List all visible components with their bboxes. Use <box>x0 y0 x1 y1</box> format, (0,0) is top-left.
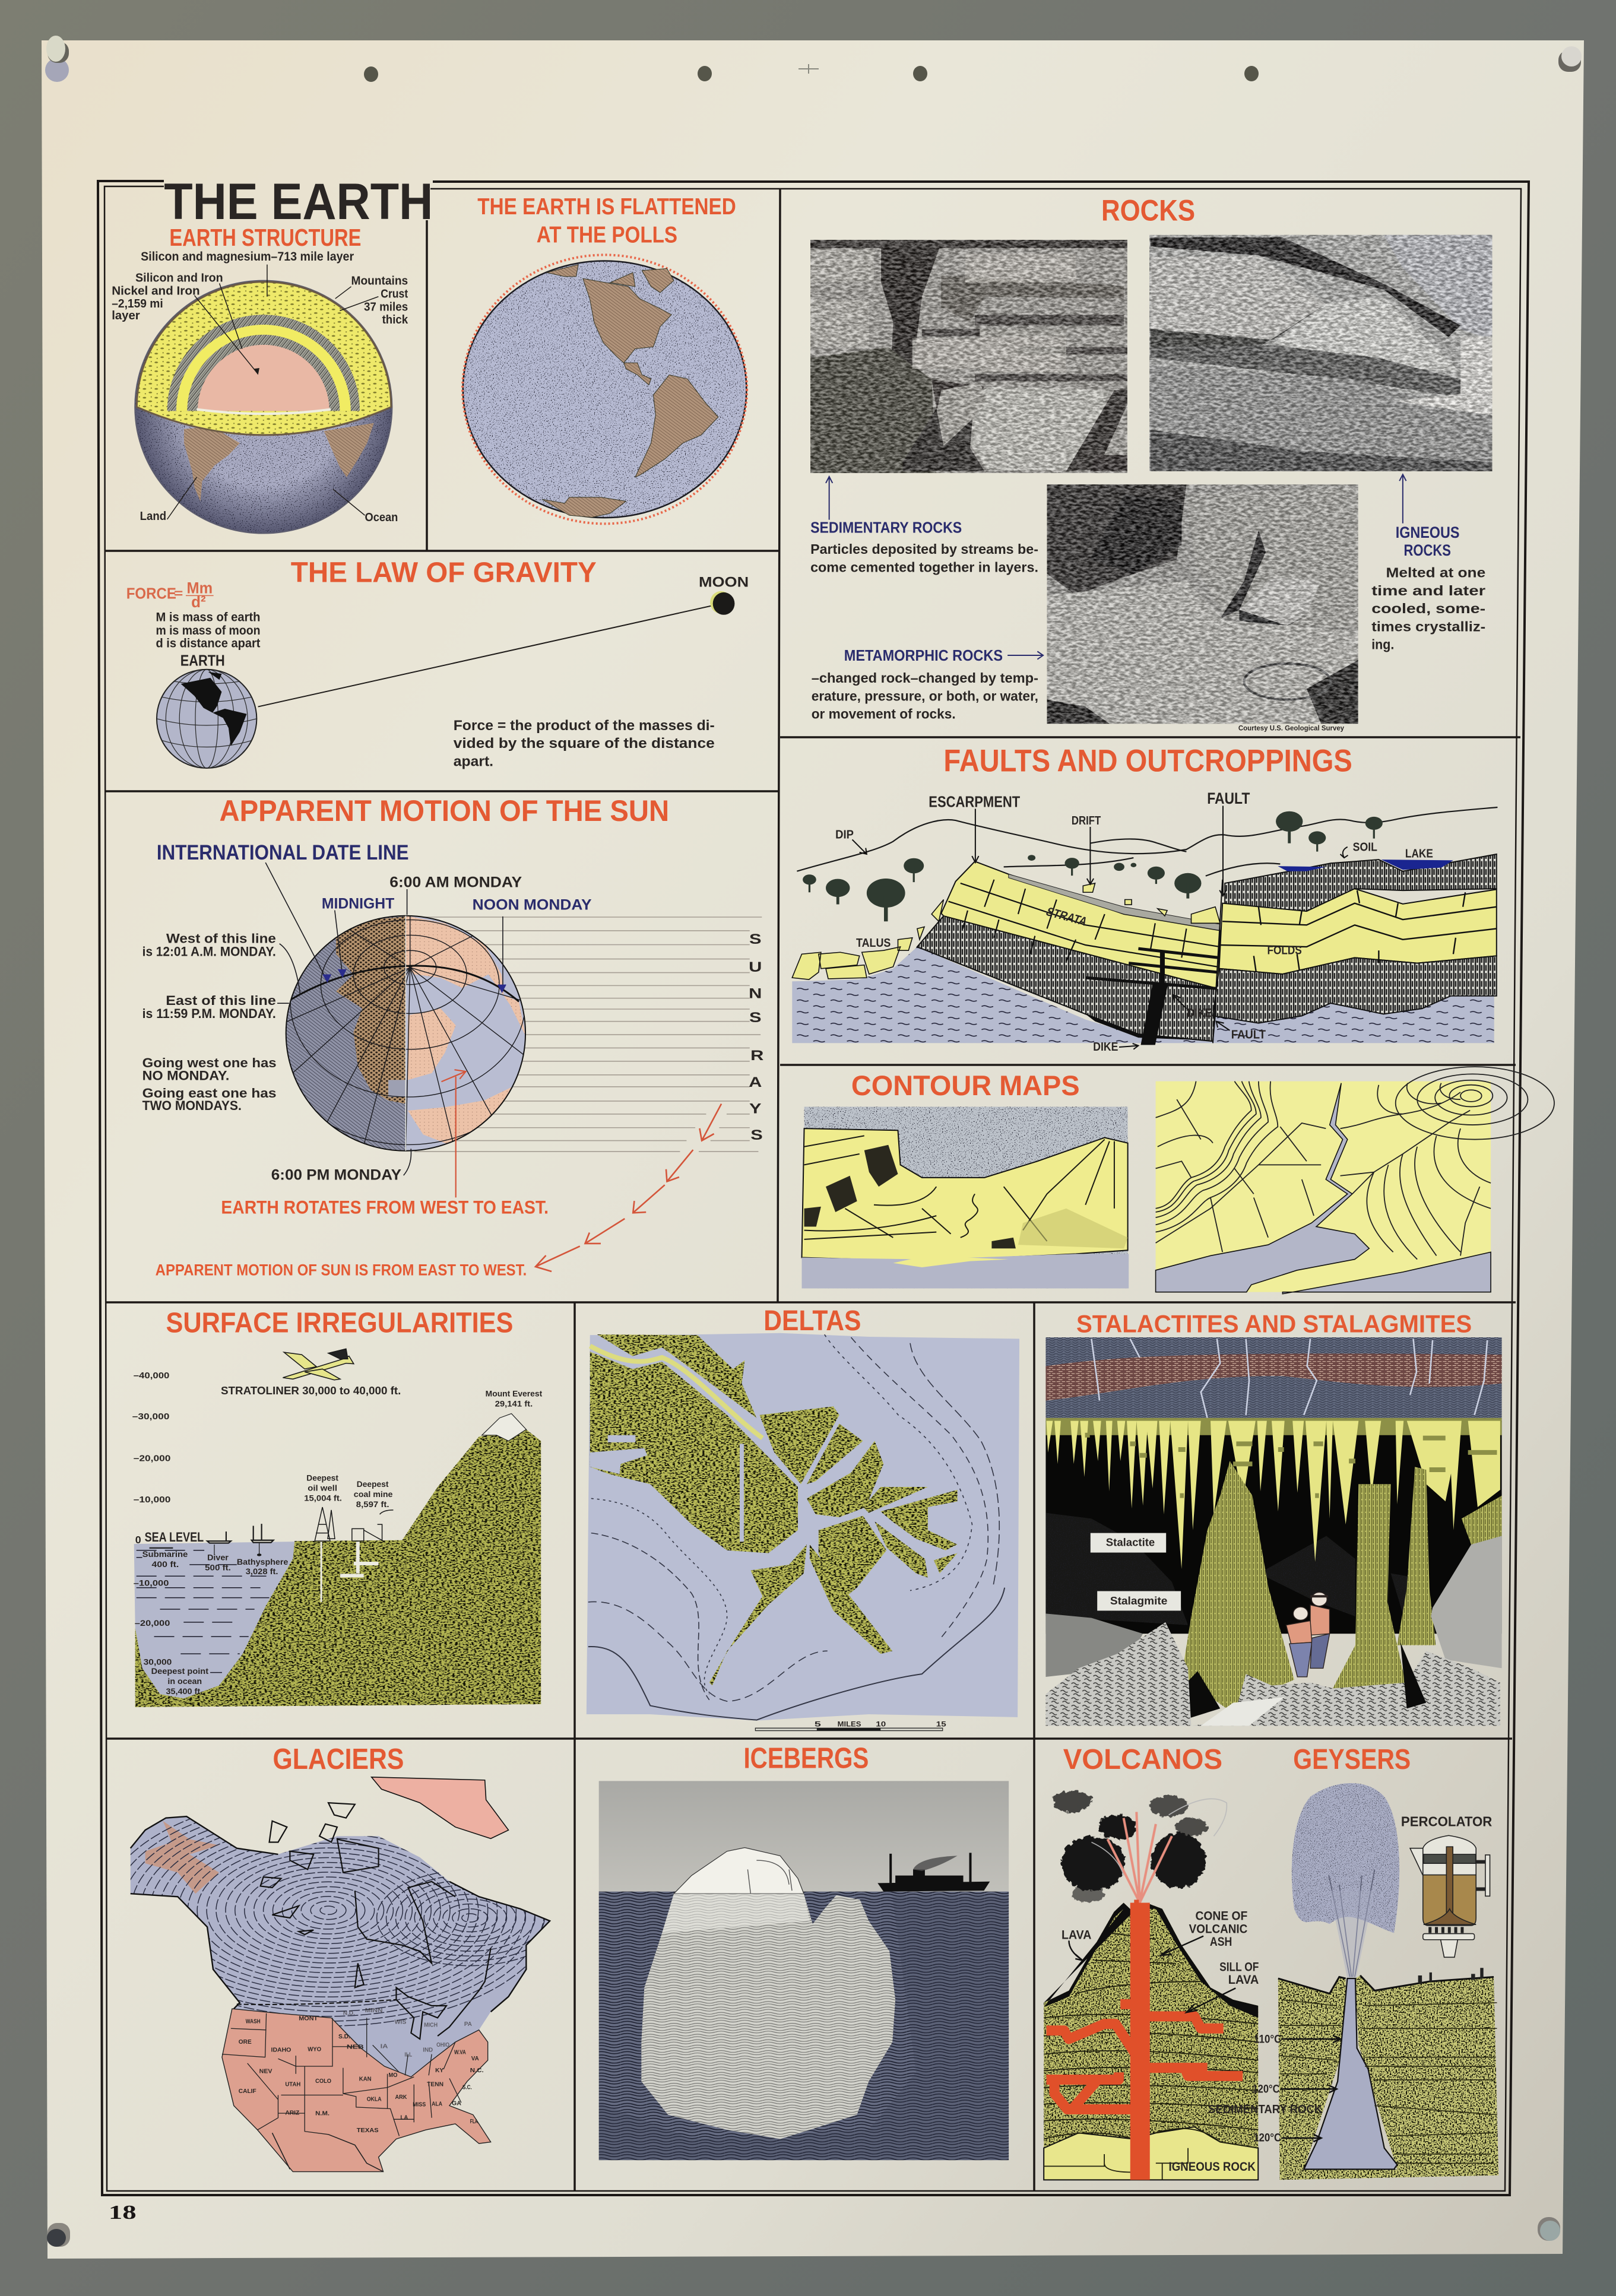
labels: temperatures and sedimentary rock: SEDIMENTARY ROCK <box>1208 2103 1322 2116</box>
labels: rock types: SEDIMENTARY ROCKS <box>810 519 962 536</box>
arrows: geyser temperatures <box>1281 2035 1341 2142</box>
frame and panel rules <box>98 181 1529 2195</box>
map: state labels: IDAHO <box>271 2047 291 2053</box>
diagram: ships, wells and mine <box>150 1507 393 1602</box>
map: state labels: N.D. <box>343 2010 355 2016</box>
map: state labels: WIS <box>394 2019 406 2025</box>
sun rays letters: A <box>749 1074 762 1090</box>
labels: time around the globe: TWO MONDAYS. <box>142 1099 242 1113</box>
labels: temperatures and sedimentary rock: PERCOLATOR <box>1401 1814 1492 1829</box>
sun rays <box>414 917 762 1152</box>
labels: earth layers <box>112 249 408 524</box>
labels: faults diagram: DRIFT <box>1072 814 1101 827</box>
labels: rock types <box>810 519 1459 664</box>
labels: earth layers: Silicon and magnesium–713 mile layer <box>141 249 354 264</box>
photo: sedimentary <box>810 240 1127 473</box>
diagram: ocean <box>134 1542 294 1698</box>
labels: midnight and noon: MIDNIGHT <box>322 896 395 912</box>
photo: igneous <box>1149 235 1493 471</box>
heading: geysers: GEYSERS <box>1293 1743 1411 1775</box>
arrows: volcano <box>1069 1936 1235 2012</box>
map: state labels: ALA <box>432 2101 442 2107</box>
map: state labels: MO <box>389 2072 398 2078</box>
labels: altitude scale <box>132 1371 542 1546</box>
labels: rock types: ROCKS <box>1403 541 1451 559</box>
panel: apparent motion of the sun <box>142 795 763 1279</box>
map: state labels: VA <box>471 2055 479 2062</box>
labels: ocean depths: Diver <box>207 1553 229 1562</box>
map: state labels: MONT <box>299 2015 318 2022</box>
labels: altitude scale: –30,000 <box>132 1412 169 1421</box>
labels: faults diagram <box>835 789 1433 1054</box>
panel: earth structure, flattened earth and gravity <box>112 173 749 769</box>
heading: APPARENT MOTION OF THE SUN <box>219 795 669 827</box>
label: date line: INTERNATIONAL DATE LINE <box>157 841 409 864</box>
labels: ocean depths: Bathysphere <box>237 1558 288 1566</box>
text: rock descriptions: Particles deposited by streams be- <box>810 541 1038 557</box>
map: scale bar <box>755 1720 946 1731</box>
labels: time around the globe: West of this line <box>166 931 276 946</box>
sun rays letters <box>749 931 763 1143</box>
diagram: mount everest snowcap <box>482 1413 526 1441</box>
labels: earth layers: Crust <box>381 287 408 300</box>
labels: rock types: METAMORPHIC ROCKS <box>844 646 1003 664</box>
photo: metamorphic <box>1047 484 1358 724</box>
heading: flattened earth: THE EARTH IS FLATTENED <box>477 194 736 220</box>
labels: altitude scale: 15,004 ft. <box>304 1493 342 1502</box>
panel: glaciers and icebergs <box>103 1742 1009 2224</box>
heading: contour maps: CONTOUR MAPS <box>851 1069 1080 1101</box>
illustration: ash cloud <box>1053 1791 1227 1903</box>
labels: ocean depths: 35,400 ft. <box>166 1687 202 1696</box>
map: contour map <box>1156 1067 1554 1294</box>
illustration: cave visitors <box>1286 1592 1330 1677</box>
labels: temperatures and sedimentary rock: 110°C <box>1254 2033 1281 2046</box>
labels: altitude scale: STRATOLINER 30,000 to 40,000 ft. <box>221 1384 401 1397</box>
text: rock descriptions: times crystalliz- <box>1371 619 1485 635</box>
illustration: landscape <box>801 1106 1129 1289</box>
panel: stalactites and stalagmites <box>1045 1311 1502 1726</box>
labels: earth layers: 37 miles <box>364 300 408 313</box>
labels: volcano: LAVA <box>1228 1972 1259 1987</box>
formula: force: Mm <box>186 579 213 597</box>
leader arrows <box>265 862 506 1175</box>
caption: apparent motion: APPARENT MOTION OF SUN IS FROM EAST TO WEST. <box>156 1262 527 1279</box>
diagram: flattened globe <box>462 255 747 524</box>
illustration: cave wall speckle <box>1045 1513 1430 1625</box>
map: state labels: GA <box>452 2100 461 2107</box>
sun rays letters: N <box>749 985 762 1001</box>
labels: altitude scale: –40,000 <box>134 1371 169 1380</box>
labels: volcano <box>1062 1908 1259 2174</box>
formula: force: = <box>174 586 183 600</box>
illustration: cave floor rocks <box>1045 1536 1502 1726</box>
heading: earth structure: EARTH STRUCTURE <box>169 224 361 251</box>
diagram: land profile <box>135 1429 541 1707</box>
map: state labels: OKLA <box>367 2096 382 2102</box>
map: greenland <box>372 1777 508 1838</box>
labels: earth layers: layer <box>112 309 140 322</box>
map: state labels: IA <box>381 2043 388 2050</box>
illustration: iceberg <box>641 1848 895 2139</box>
map: state labels: S.D. <box>338 2034 350 2040</box>
panel: faults, outcroppings and contour maps <box>792 743 1554 1294</box>
labels: time around the globe: is 11:59 P.M. MONDAY. <box>142 1007 276 1021</box>
map: state labels: W.VA <box>454 2049 466 2056</box>
map: state labels: ARK <box>395 2094 407 2101</box>
map: state labels: LA <box>400 2114 408 2121</box>
labels: altitude scale: 29,141 ft. <box>495 1398 533 1408</box>
illustration: volcano cone and strata <box>1044 1903 1258 2180</box>
map: delta details <box>588 1334 1005 1720</box>
formula key: EARTH <box>180 652 225 669</box>
map: state labels: PA <box>464 2021 472 2028</box>
labels: earth layers: Ocean <box>365 510 398 524</box>
formula: force <box>126 579 214 611</box>
diagram: left fault block <box>917 861 1220 1045</box>
labels: time around the globe: is 12:01 A.M. MONDAY. <box>142 944 276 959</box>
map: delta water <box>587 1333 1019 1721</box>
labels: earth layers: Land <box>140 509 166 523</box>
icon: percolator <box>1410 1835 1490 1957</box>
map: state labels: IND <box>423 2047 433 2053</box>
labels: ocean depths <box>134 1549 288 1696</box>
labels: time around the globe: 6:00 PM MONDAY <box>271 1167 401 1184</box>
formula key: d is distance apart <box>156 636 261 650</box>
formula key: m is mass of moon <box>156 623 260 638</box>
labels: volcano: IGNEOUS ROCK <box>1169 2159 1256 2174</box>
sun rays letters: S <box>749 931 762 947</box>
text: force definition: apart. <box>454 753 493 769</box>
map: state labels: MINN <box>365 2008 383 2014</box>
page number: 18 <box>109 2202 137 2224</box>
illustration: geyser ground <box>1278 1968 1498 2180</box>
map: delta land <box>590 1334 958 1685</box>
labels: altitude scale: Deepest <box>357 1479 389 1489</box>
text: rock descriptions <box>810 541 1486 732</box>
map: state labels: KAN <box>359 2076 372 2082</box>
heading: flattened earth <box>477 194 736 248</box>
labels: earth layers: Mountains <box>351 274 408 287</box>
map: state labels: MISS <box>413 2101 426 2108</box>
labels: ocean depths: in ocean <box>167 1677 202 1686</box>
heading: STALACTITES AND STALAGMITES <box>1076 1311 1472 1338</box>
text: rock descriptions: come cemented together in layers. <box>810 559 1038 575</box>
illustration: geyser cloud <box>1292 1783 1399 1978</box>
labels: volcano: ASH <box>1210 1935 1232 1949</box>
formula key <box>156 573 749 669</box>
text: rock descriptions: Melted at one <box>1386 565 1485 581</box>
labels: earth layers: Nickel and Iron <box>112 284 200 297</box>
panel: surface irregularities and deltas: DELTAS <box>763 1304 861 1336</box>
map: state labels: ARIZ <box>285 2110 299 2116</box>
map: scale bar: 5 <box>815 1720 821 1728</box>
map: state labels: TEXAS <box>357 2127 379 2134</box>
panel: rocks <box>810 194 1493 732</box>
map: state labels: COLO <box>315 2078 331 2085</box>
map: scale bar: 15 <box>936 1720 946 1728</box>
map: state labels: ORE <box>239 2038 252 2045</box>
illustration: magma conduit and sills <box>1047 1899 1243 2180</box>
map: ice sheet <box>129 1802 551 2076</box>
panel: volcanos and geysers <box>1044 1743 1498 2180</box>
labels: faults diagram: FOLDS <box>1267 944 1302 957</box>
labels: ocean depths: 500 ft. <box>205 1563 231 1572</box>
illustration: sea and sky <box>599 1781 1009 2160</box>
map: state labels: KY <box>435 2067 443 2074</box>
labels: ocean depths: Deepest point <box>151 1667 209 1676</box>
labels: time around the globe: 6:00 AM MONDAY <box>389 874 522 891</box>
labels: faults diagram: FAULT <box>1231 1028 1266 1041</box>
panel: glaciers and icebergs: GLACIERS <box>273 1743 404 1775</box>
labels: earth layers: –2,159 mi <box>112 296 163 310</box>
caption: earth rotates: EARTH ROTATES FROM WEST TO EAST. <box>221 1197 549 1217</box>
heading: ROCKS <box>1101 194 1195 227</box>
labels: time around the globe: Going west one has <box>142 1056 277 1070</box>
text: force definition: vided by the square of the distance <box>454 735 715 751</box>
map: state labels <box>239 2008 484 2134</box>
labels: time around the globe: East of this line <box>166 994 276 1008</box>
labels: earth layers: Silicon and Iron <box>135 271 223 284</box>
labels: ocean depths: –20,000 <box>135 1619 170 1628</box>
heading: volcanos: VOLCANOS <box>1063 1743 1222 1775</box>
labels: time around the globe: NO MONDAY. <box>142 1068 229 1083</box>
labels: altitude scale: oil well <box>308 1483 337 1492</box>
text: rock descriptions: cooled, some- <box>1371 601 1485 616</box>
formula: force: d² <box>191 594 206 611</box>
text: rock descriptions: –changed rock–changed by temp- <box>812 670 1038 686</box>
labels: faults diagram: LAKE <box>1405 847 1433 861</box>
labels: faults diagram: DIKE <box>1187 1007 1212 1020</box>
labels: rock types: IGNEOUS <box>1396 523 1459 541</box>
labels: faults diagram: DIKE <box>1093 1041 1118 1054</box>
diagram: globe day and night <box>285 915 526 1152</box>
map: scale bar: MILES <box>838 1720 861 1728</box>
text: rock descriptions: ing. <box>1371 637 1394 652</box>
labels: ocean depths: 3,028 ft. <box>246 1567 278 1576</box>
labels: faults diagram: STRATA <box>1044 905 1089 928</box>
arrows: sun motion <box>536 1104 721 1271</box>
sun rays letters: S <box>749 1009 762 1025</box>
labels: ocean depths: Submarine <box>142 1549 188 1559</box>
labels: ocean depths: –10,000 <box>134 1578 169 1587</box>
heading: faults: FAULTS AND OUTCROPPINGS <box>943 743 1352 778</box>
panel: glaciers and icebergs: ICEBERGS <box>743 1742 869 1774</box>
text: force definition <box>454 716 715 769</box>
label: stalagmite <box>1097 1591 1181 1610</box>
labels: faults diagram: ESCARPMENT <box>929 794 1021 810</box>
text: force definition: Force = the product of the masses di- <box>454 716 715 733</box>
text: rock descriptions: or movement of rocks. <box>812 706 956 722</box>
map: state labels: TENN <box>427 2081 443 2088</box>
panel: surface irregularities and deltas: Mount Everest <box>486 1388 542 1398</box>
map: state labels: OHIO <box>436 2041 449 2048</box>
map: state labels: ILL <box>404 2051 412 2058</box>
map: state labels: N.C. <box>470 2067 484 2074</box>
labels: altitude scale: 0 <box>135 1534 141 1546</box>
illustration: stalagmites <box>1178 1461 1436 1718</box>
map: state labels: N.M. <box>315 2110 329 2117</box>
labels: volcano: CONE OF <box>1196 1908 1247 1923</box>
sun rays letters: S <box>750 1127 763 1143</box>
diagram: talus <box>792 883 1220 979</box>
map: state labels: NEB <box>347 2044 364 2050</box>
formula key: M is mass of earth <box>156 610 260 624</box>
heading: flattened earth: AT THE POLLS <box>537 221 677 248</box>
text: rock descriptions: time and later <box>1371 583 1486 598</box>
map: state labels: MICH <box>424 2022 438 2028</box>
map: state labels: WASH <box>246 2018 261 2025</box>
labels: faults diagram: TALUS <box>856 937 891 950</box>
labels: temperatures and sedimentary rock: 120°C <box>1252 2083 1280 2095</box>
illustration: cave <box>1045 1421 1502 1634</box>
labels: time around the globe <box>142 874 522 1184</box>
label: stalactite: Stalactite <box>1106 1536 1155 1549</box>
illustration: ship <box>877 1853 990 1892</box>
illustration: stalactites <box>1045 1418 1502 1569</box>
labels: time around the globe: Going east one has <box>142 1086 277 1101</box>
diagram: hills <box>797 807 1497 876</box>
sun rays letters: U <box>749 959 762 975</box>
labels: volcano: SILL OF <box>1219 1959 1259 1974</box>
formula key: MOON <box>699 573 749 590</box>
labels: altitude scale: 8,597 ft. <box>356 1499 389 1509</box>
arrows: faults diagram <box>853 806 1348 1049</box>
map: state labels: WYO <box>308 2046 321 2053</box>
labels: volcano: VOLCANIC <box>1189 1921 1247 1936</box>
heading: law of gravity: THE LAW OF GRAVITY <box>291 556 597 588</box>
labels: altitude scale: –10,000 <box>134 1495 170 1504</box>
illustration: rock strata <box>1045 1337 1502 1422</box>
sun rays letters: Y <box>749 1101 762 1117</box>
labels: earth layers: thick <box>382 312 408 326</box>
labels: faults diagram: FAULT <box>1207 789 1250 807</box>
labels: altitude scale: SEA LEVEL <box>145 1530 204 1545</box>
diagram: right fault block <box>1213 854 1497 1043</box>
panel: surface irregularities and deltas <box>132 1304 1019 1731</box>
labels: midnight and noon: NOON MONDAY <box>473 897 592 913</box>
label: stalactite <box>1091 1533 1166 1553</box>
hanging holes <box>364 64 1259 82</box>
labels: altitude scale: –20,000 <box>134 1453 170 1463</box>
labels: ocean depths: 400 ft. <box>152 1559 179 1569</box>
map: united states <box>222 2009 491 2172</box>
labels: faults diagram: SOIL <box>1353 841 1377 854</box>
label: stalagmite: Stalagmite <box>1110 1595 1167 1607</box>
map: scale bar: 10 <box>876 1720 886 1728</box>
text: rock descriptions: erature, pressure, or both, or water, <box>812 688 1038 703</box>
labels: altitude scale: coal mine <box>354 1489 392 1499</box>
map: state labels: FLA <box>470 2119 478 2125</box>
labels: volcano: LAVA <box>1062 1927 1091 1942</box>
labels: ocean depths: 30,000 <box>144 1657 172 1667</box>
map: state labels: NEV <box>259 2068 272 2075</box>
icon: airplane <box>283 1349 354 1380</box>
text: rock descriptions: Courtesy U.S. Geological Survey <box>1238 724 1344 732</box>
title: THE EARTH <box>164 173 433 230</box>
labels: temperatures and sedimentary rock <box>1208 1814 1492 2144</box>
diagram: cutaway earth <box>135 265 392 534</box>
arrows to photos <box>826 474 1406 659</box>
map: state labels: UTAH <box>285 2081 300 2088</box>
labels: midnight and noon <box>322 896 592 913</box>
rotation arrow <box>442 1070 466 1197</box>
map: state labels: CALIF <box>239 2088 256 2094</box>
diagram: bedrock <box>792 947 1494 1043</box>
labels: temperatures and sedimentary rock: 120°C <box>1253 2132 1281 2144</box>
sun rays letters: R <box>750 1047 763 1063</box>
panel: surface irregularities and deltas: SURFACE IRREGULARITIES <box>166 1306 513 1339</box>
map: state labels: S.C. <box>462 2084 472 2091</box>
diagram: trees <box>803 811 1383 921</box>
labels: altitude scale: Deepest <box>306 1473 338 1482</box>
formula: force: FORCE <box>126 585 176 602</box>
diagram: earth to moon <box>157 591 734 768</box>
labels: faults diagram: DIP <box>835 829 854 842</box>
